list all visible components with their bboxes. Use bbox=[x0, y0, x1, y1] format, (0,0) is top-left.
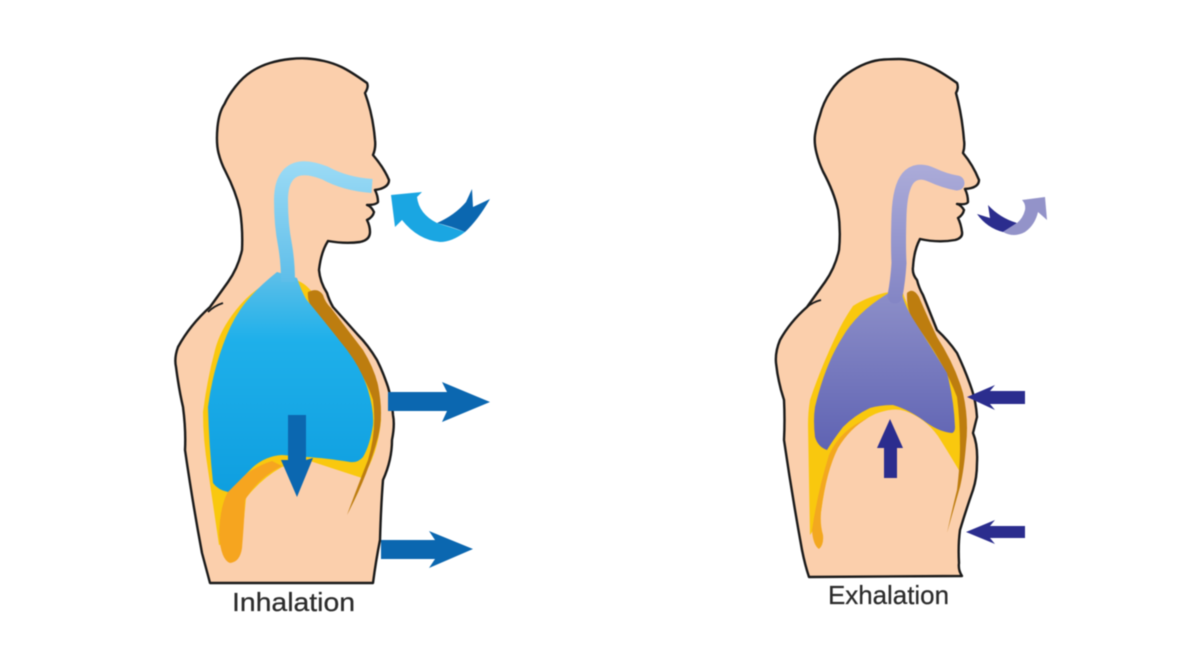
airway: inhalation bbox=[281, 168, 372, 282]
pleura: yellow lining bbox=[203, 280, 381, 545]
arrow: chest contracts bbox=[967, 385, 1025, 410]
pleura: yellow lining bbox=[808, 290, 965, 535]
rib wall: brown band bbox=[308, 290, 381, 515]
arrow: diaphragm moves up bbox=[877, 419, 903, 478]
lung: exhalation bbox=[814, 290, 955, 450]
panel: inhalation figure bbox=[175, 58, 490, 617]
shoulder crease bbox=[807, 300, 821, 307]
arrow: air leaving through the nose bbox=[977, 197, 1047, 235]
arrow: chest expands bbox=[388, 382, 490, 422]
arrow: abdomen expands bbox=[381, 531, 473, 568]
body silhouette: inhalation bbox=[175, 58, 394, 583]
arrow: abdomen contracts bbox=[966, 520, 1025, 544]
label: exhalation: Exhalation bbox=[828, 580, 949, 610]
shoulder crease bbox=[208, 303, 223, 312]
diaphragm: orange muscle bbox=[219, 461, 282, 563]
rib wall: brown band bbox=[907, 291, 967, 533]
arrow: air entering through the nose bbox=[391, 189, 490, 242]
body silhouette: exhalation bbox=[776, 59, 979, 577]
airway: exhalation bbox=[895, 172, 957, 296]
panel: exhalation figure bbox=[776, 59, 1047, 610]
arrow: diaphragm moves down bbox=[281, 415, 313, 497]
diaphragm: orange muscle bbox=[812, 418, 868, 549]
label: inhalation: Inhalation bbox=[232, 587, 355, 617]
lung: inhalation bbox=[208, 272, 373, 492]
